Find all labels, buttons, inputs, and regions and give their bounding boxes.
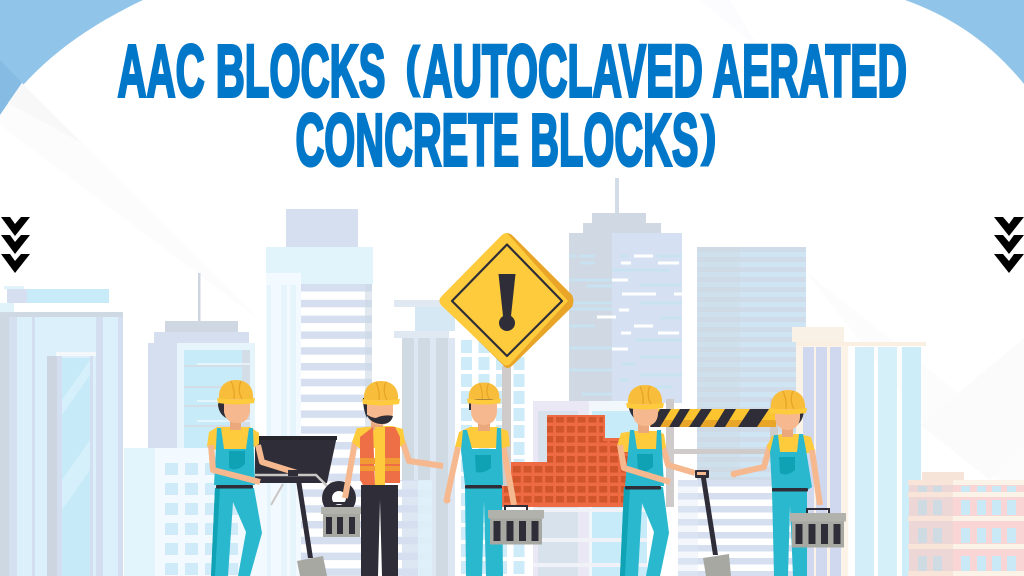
barrier posts xyxy=(666,399,778,507)
barrier bar xyxy=(650,409,776,427)
top-left blue corner xyxy=(0,0,143,115)
bricks stack xyxy=(502,415,632,507)
building: cream columned tower xyxy=(792,327,926,576)
top-right blue corner xyxy=(905,0,1024,84)
building: columned tower behind sign xyxy=(394,300,528,576)
building: pink low-rise xyxy=(908,472,1024,576)
building: tall striped tower xyxy=(266,209,373,576)
title: CONCRETE BLOCKS xyxy=(296,98,698,182)
warning sign with exclamation mark xyxy=(440,233,574,486)
toolbox: worker 3 xyxy=(488,506,544,544)
wheelbarrow xyxy=(254,436,356,515)
icon: right triple chevrons xyxy=(994,217,1024,273)
toolbox: worker 5 xyxy=(790,509,846,548)
building: antenna tower xyxy=(148,273,255,449)
worker 5 with toolbox xyxy=(730,390,820,576)
worker 3 with toolbox xyxy=(444,382,514,576)
title: AAC BLOCKS xyxy=(118,30,386,112)
worker 4 with shovel xyxy=(617,385,731,576)
building: speckled tower xyxy=(569,178,682,403)
building: far left glass tower xyxy=(0,286,123,576)
toolbox: worker 2 xyxy=(321,503,361,537)
building: striped glass tower xyxy=(678,247,806,576)
worker 2 with safety vest xyxy=(345,381,443,576)
building: low block with windows xyxy=(124,448,267,576)
title: ) xyxy=(702,106,716,166)
worker 1 with shovel xyxy=(207,380,327,576)
icon: left triple chevrons xyxy=(1,217,30,273)
title: ( xyxy=(406,37,419,97)
building: mid low-rise behind bricks xyxy=(533,401,647,576)
